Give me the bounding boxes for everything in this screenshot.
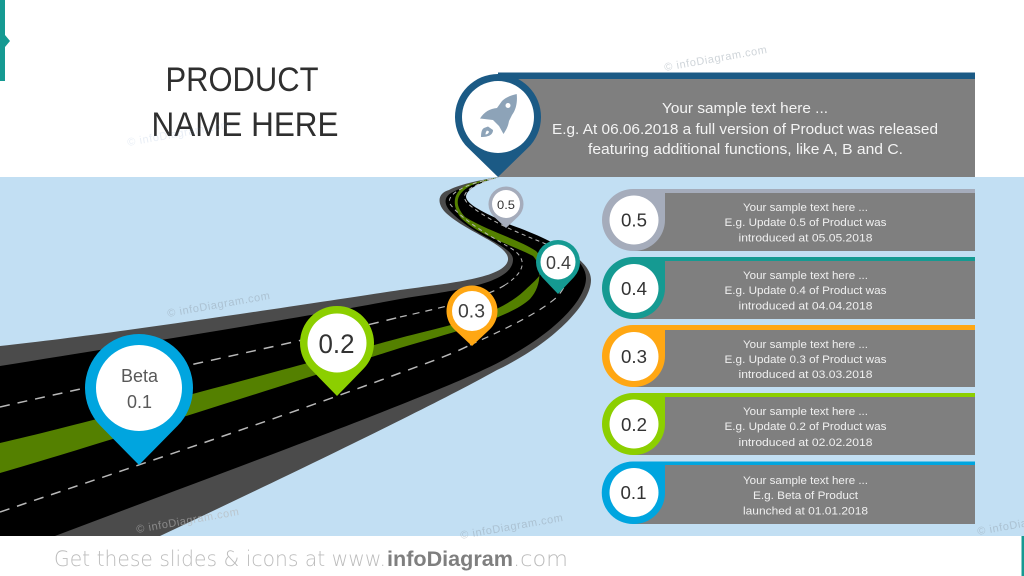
row: update 0.5: 0.5 bbox=[621, 210, 647, 230]
row: update 0.2: Your sample text here ... bbox=[743, 406, 868, 418]
row: update 0.2: 0.2 bbox=[621, 415, 647, 435]
pin: beta 0.1: Beta bbox=[121, 366, 159, 386]
green centre strip bbox=[0, 178, 544, 473]
road shoulder bbox=[0, 177, 591, 536]
road asphalt bbox=[0, 177, 586, 536]
bottom-right teal accent bbox=[1022, 536, 1024, 576]
pin: 0.2: 0.2 bbox=[318, 329, 354, 359]
watermarks: © infoDiagram.com bbox=[166, 290, 271, 320]
row: beta 0.1: Your sample text here ... bbox=[743, 475, 868, 487]
watermarks bbox=[126, 44, 1024, 542]
row: update 0.2: introduced at 02.02.2018 bbox=[738, 437, 872, 449]
top panel text: featuring additional functions, like A, B and C. bbox=[588, 142, 903, 158]
pin: beta 0.1: 0.1 bbox=[127, 392, 152, 412]
top panel text bbox=[552, 101, 938, 158]
row: beta 0.1: E.g. Beta of Product bbox=[753, 490, 859, 502]
top-left teal accent bbox=[0, 0, 10, 81]
pin: 0.5 bbox=[489, 187, 524, 228]
pin: 0.2 bbox=[300, 306, 374, 396]
row: update 0.3: Your sample text here ... bbox=[743, 339, 868, 351]
row: update 0.5: introduced at 05.05.2018 bbox=[738, 232, 872, 244]
pin: beta 0.1 bbox=[85, 334, 193, 465]
top panel: full version bbox=[498, 72, 975, 177]
row: beta 0.1: launched at 01.01.2018 bbox=[743, 506, 868, 518]
top panel body bbox=[498, 79, 975, 177]
sky background band bbox=[0, 177, 1024, 536]
pin: 0.3: 0.3 bbox=[458, 302, 485, 322]
row: update 0.4: 0.4 bbox=[621, 279, 647, 299]
watermarks: © infoDiagram.com bbox=[459, 512, 564, 542]
watermarks: © infoDiagram.com bbox=[663, 44, 768, 74]
row: update 0.3: introduced at 03.03.2018 bbox=[738, 369, 872, 381]
row: update 0.4: E.g. Update 0.4 of Product was bbox=[724, 285, 887, 297]
icon: rocket bbox=[480, 94, 517, 137]
pin: 0.3 bbox=[446, 286, 498, 346]
footer: infoDiagram bbox=[387, 548, 513, 571]
row: update 0.3: 0.3 bbox=[621, 347, 647, 367]
watermarks: © infoDiagram.com bbox=[126, 119, 231, 149]
row: update 0.3 bbox=[602, 325, 975, 387]
pin: rocket bbox=[455, 74, 541, 177]
title: PRODUCT bbox=[166, 61, 318, 99]
top panel text: Your sample text here ... bbox=[662, 101, 828, 117]
footer bbox=[54, 547, 568, 571]
title: NAME HERE bbox=[152, 106, 338, 144]
pin: 0.4: 0.4 bbox=[546, 253, 571, 273]
row: beta 0.1 bbox=[602, 462, 975, 524]
row: update 0.4 bbox=[602, 257, 975, 319]
top panel bar bbox=[498, 72, 975, 80]
dashed lane lines bbox=[0, 178, 568, 512]
row: update 0.4: Your sample text here ... bbox=[743, 270, 868, 282]
winding road bbox=[0, 177, 591, 536]
watermarks: © infoDiagram.com bbox=[135, 506, 240, 536]
title bbox=[152, 61, 338, 144]
row: update 0.2: E.g. Update 0.2 of Product was bbox=[724, 421, 887, 433]
row: update 0.4: introduced at 04.04.2018 bbox=[738, 300, 872, 312]
row: update 0.5 bbox=[602, 189, 975, 251]
pin: 0.4 bbox=[536, 240, 580, 294]
row: update 0.2 bbox=[602, 393, 975, 455]
footer: Get these slides & icons at www. bbox=[54, 547, 386, 571]
row: update 0.5: E.g. Update 0.5 of Product was bbox=[724, 217, 887, 229]
footer: .com bbox=[513, 547, 568, 571]
top panel text: E.g. At 06.06.2018 a full version of Product was released bbox=[552, 122, 938, 138]
row: beta 0.1: 0.1 bbox=[620, 483, 646, 503]
pin: 0.5: 0.5 bbox=[497, 200, 515, 212]
row: update 0.5: Your sample text here ... bbox=[743, 202, 868, 214]
row: update 0.3: E.g. Update 0.3 of Product was bbox=[724, 354, 887, 366]
